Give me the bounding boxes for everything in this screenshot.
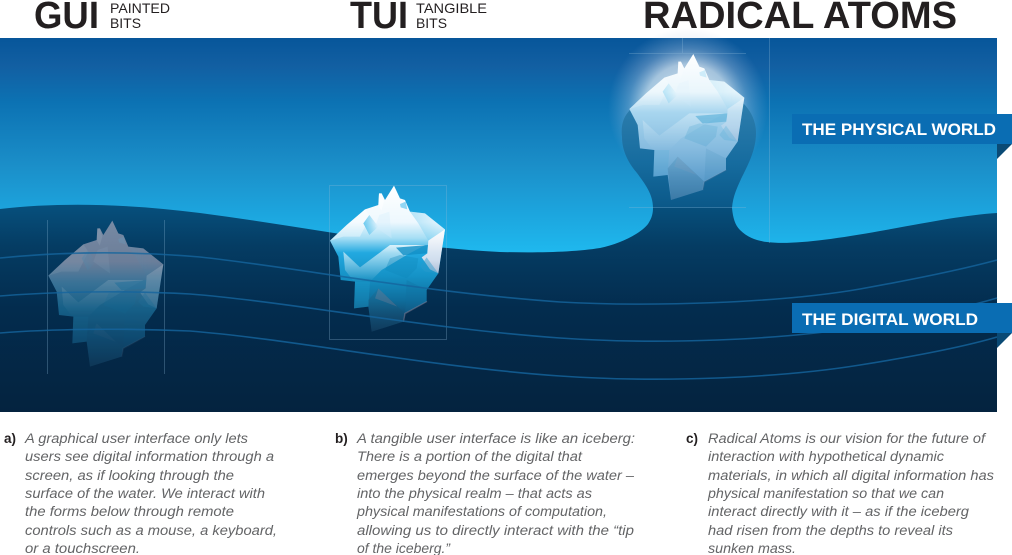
caption a: users see digital information through a — [25, 449, 275, 464]
heading: GUI painted bits — [34, 0, 170, 37]
caption c: interaction with hypothetical dynamic — [708, 449, 944, 464]
caption c: Radical Atoms is our vision for the future of — [708, 431, 986, 446]
caption a: a) — [4, 431, 16, 446]
caption b: There is a portion of the digital that — [357, 449, 583, 464]
heading: GUI painted bits: BITS — [110, 15, 141, 31]
raised water bulge under radical atoms iceberg — [622, 103, 756, 225]
caption b — [335, 431, 635, 555]
caption b: b) — [335, 431, 348, 446]
caption b: emerges beyond the surface of the water – — [357, 468, 635, 483]
label: the physical world: THE PHYSICAL WORLD — [802, 120, 996, 139]
caption b: allowing us to directly interact with the “tip — [357, 523, 635, 538]
iceberg: GUI — [48, 221, 163, 367]
iceberg: Radical Atoms — [629, 54, 744, 200]
caption a — [4, 431, 277, 555]
caption b: into the physical realm – that acts as — [357, 486, 592, 501]
caption b: A tangible user interface is like an iceberg: — [356, 431, 635, 446]
caption a: the forms below through remote — [25, 504, 234, 519]
caption a: A graphical user interface only lets — [24, 431, 248, 446]
heading: TUI tangible bits: BITS — [416, 15, 447, 31]
glow behind raised iceberg — [608, 28, 768, 188]
current lines — [0, 253, 997, 379]
caption c: materials, in which all digital information has — [708, 468, 994, 483]
heading: GUI painted bits: PAINTED — [110, 0, 170, 16]
label: the physical world — [792, 114, 1012, 159]
caption c — [686, 431, 994, 555]
caption a: screen, as if looking through the — [25, 468, 234, 483]
caption c: physical manifestation so that we can — [707, 486, 944, 501]
heading: TUI tangible bits: TANGIBLE — [416, 0, 487, 16]
guide lines around icebergs — [48, 38, 770, 374]
label: the digital world: THE DIGITAL WORLD — [802, 310, 978, 329]
heading: TUI tangible bits — [350, 0, 487, 37]
caption c: had risen from the depths to reveal its — [708, 523, 953, 538]
caption c: c) — [686, 431, 698, 446]
iceberg: TUI — [330, 186, 445, 332]
illustration background: sky — [0, 38, 997, 412]
caption c: interact directly with it – as if the iceberg — [708, 504, 970, 519]
caption a: surface of the water. We interact with — [25, 486, 265, 501]
label: the digital world — [792, 303, 1012, 348]
water surface: the digital world — [0, 205, 997, 412]
caption b: physical manifestations of computation, — [356, 504, 607, 519]
caption a: controls such as a mouse, a keyboard, — [25, 523, 277, 538]
